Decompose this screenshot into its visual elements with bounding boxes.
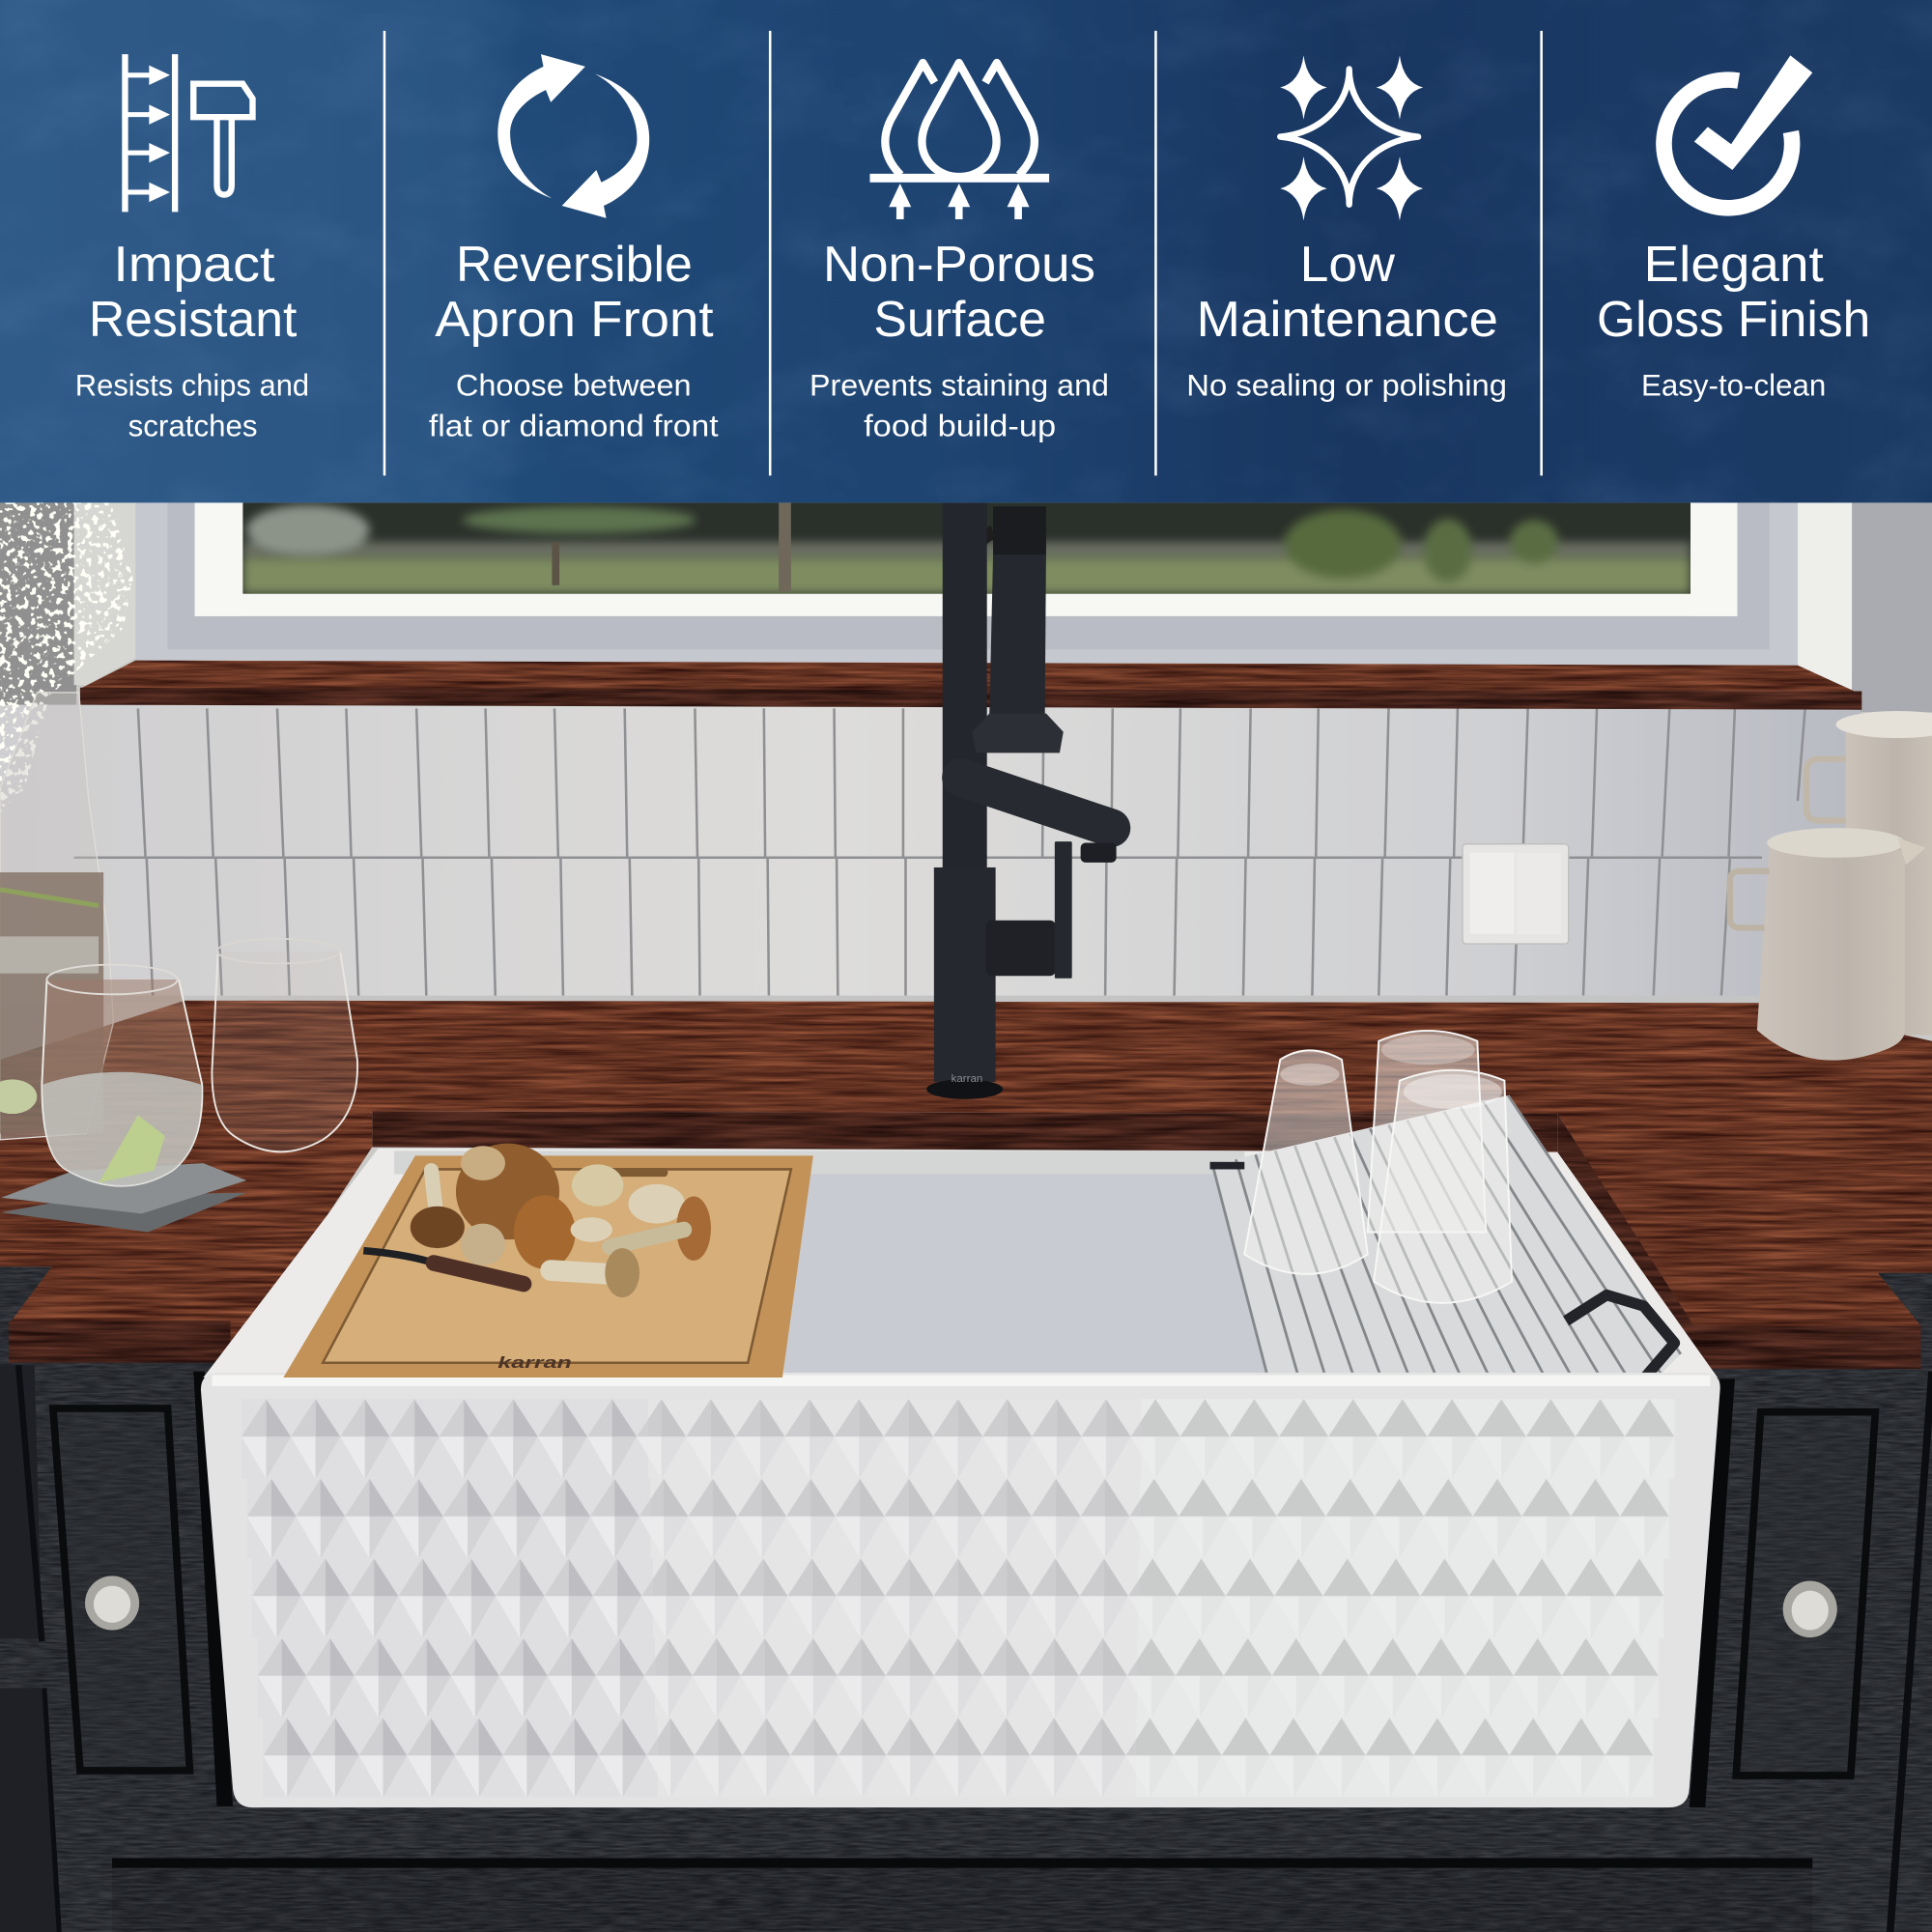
heading: Low bbox=[1300, 237, 1395, 293]
small glass bbox=[1244, 1050, 1368, 1274]
sink top rim and basin bbox=[203, 1149, 1718, 1380]
column: reversible apron front: Apron Front bbox=[435, 292, 714, 348]
walls beside window bbox=[0, 502, 1932, 712]
icon: sparkles bbox=[1280, 55, 1423, 220]
drinking glasses and vase, left bbox=[0, 502, 357, 1233]
logo: karran bbox=[497, 1353, 572, 1372]
ceramic jugs bbox=[1730, 711, 1932, 1061]
heading: Impact bbox=[113, 237, 275, 293]
column: non-porous surface bbox=[810, 63, 1109, 443]
description: No sealing or polishing bbox=[1186, 367, 1507, 402]
column: non-porous surface: Surface bbox=[873, 292, 1046, 348]
neck bbox=[943, 502, 987, 870]
left door panel bbox=[0, 1365, 233, 1932]
pull-down hose bbox=[962, 532, 993, 627]
description: Prevents staining and bbox=[810, 367, 1109, 402]
apron front with diamond pattern bbox=[201, 1373, 1720, 1807]
drinking glasses, right bbox=[1244, 1031, 1512, 1303]
mushrooms and knife bbox=[363, 1144, 711, 1297]
bamboo cutting board bbox=[283, 1155, 813, 1378]
banner background bbox=[0, 0, 1932, 502]
window view: garden bbox=[195, 502, 1737, 616]
icon: hammer and wall bbox=[122, 54, 252, 212]
heading: Elegant bbox=[1644, 237, 1824, 293]
icon: reversible arrows bbox=[497, 54, 649, 218]
counter edges bbox=[9, 1112, 1921, 1369]
column: impact resistant bbox=[75, 54, 309, 443]
column: low maintenance: Maintenance bbox=[1197, 292, 1498, 348]
diamond rows bbox=[242, 1399, 1674, 1797]
column: low maintenance bbox=[1186, 55, 1507, 402]
column: reversible apron front: flat or diamond front bbox=[429, 409, 719, 443]
window frame bbox=[135, 502, 1798, 666]
spray head bbox=[993, 506, 1046, 555]
back jug bbox=[1806, 711, 1932, 1035]
heading: Non-Porous bbox=[823, 237, 1095, 293]
back glass bbox=[1368, 1031, 1486, 1233]
empty glass bbox=[212, 939, 357, 1151]
flowers bbox=[0, 502, 133, 813]
column: elegant gloss finish bbox=[1597, 55, 1870, 402]
napkin bbox=[1, 1193, 246, 1233]
icon: check mark in circle bbox=[1663, 55, 1812, 208]
vase bbox=[0, 693, 113, 1140]
lower drawer panel bbox=[112, 1858, 1812, 1932]
feature banner bbox=[0, 0, 1932, 502]
light switch bbox=[1463, 844, 1569, 944]
cabinets bbox=[0, 1266, 1932, 1932]
drying rack bbox=[1210, 1095, 1681, 1378]
dividers bbox=[384, 31, 1542, 475]
column: impact resistant: Resistant bbox=[89, 292, 298, 348]
description: Easy-to-clean bbox=[1641, 367, 1826, 402]
glass with water and lime bbox=[42, 965, 202, 1186]
window sill bbox=[80, 661, 1861, 710]
body bbox=[934, 867, 996, 1082]
heading: Reversible bbox=[456, 237, 693, 293]
icon: water drops bbox=[870, 63, 1049, 219]
faucet: karran bbox=[952, 1073, 982, 1085]
faucet bbox=[926, 502, 1117, 1099]
tiled backsplash bbox=[0, 705, 1861, 1003]
column: elegant gloss finish: Gloss Finish bbox=[1597, 292, 1870, 348]
description: Choose between bbox=[456, 367, 692, 402]
column: non-porous surface: food build-up bbox=[864, 409, 1056, 443]
front glass bbox=[1374, 1070, 1512, 1303]
wood countertop bbox=[0, 1001, 1932, 1369]
spout bbox=[961, 778, 1112, 828]
description: Resists chips and bbox=[75, 367, 309, 402]
column: impact resistant: scratches bbox=[128, 409, 258, 443]
column: reversible apron front bbox=[429, 54, 719, 443]
right door panel bbox=[1690, 1372, 1932, 1932]
front jug bbox=[1730, 828, 1926, 1061]
